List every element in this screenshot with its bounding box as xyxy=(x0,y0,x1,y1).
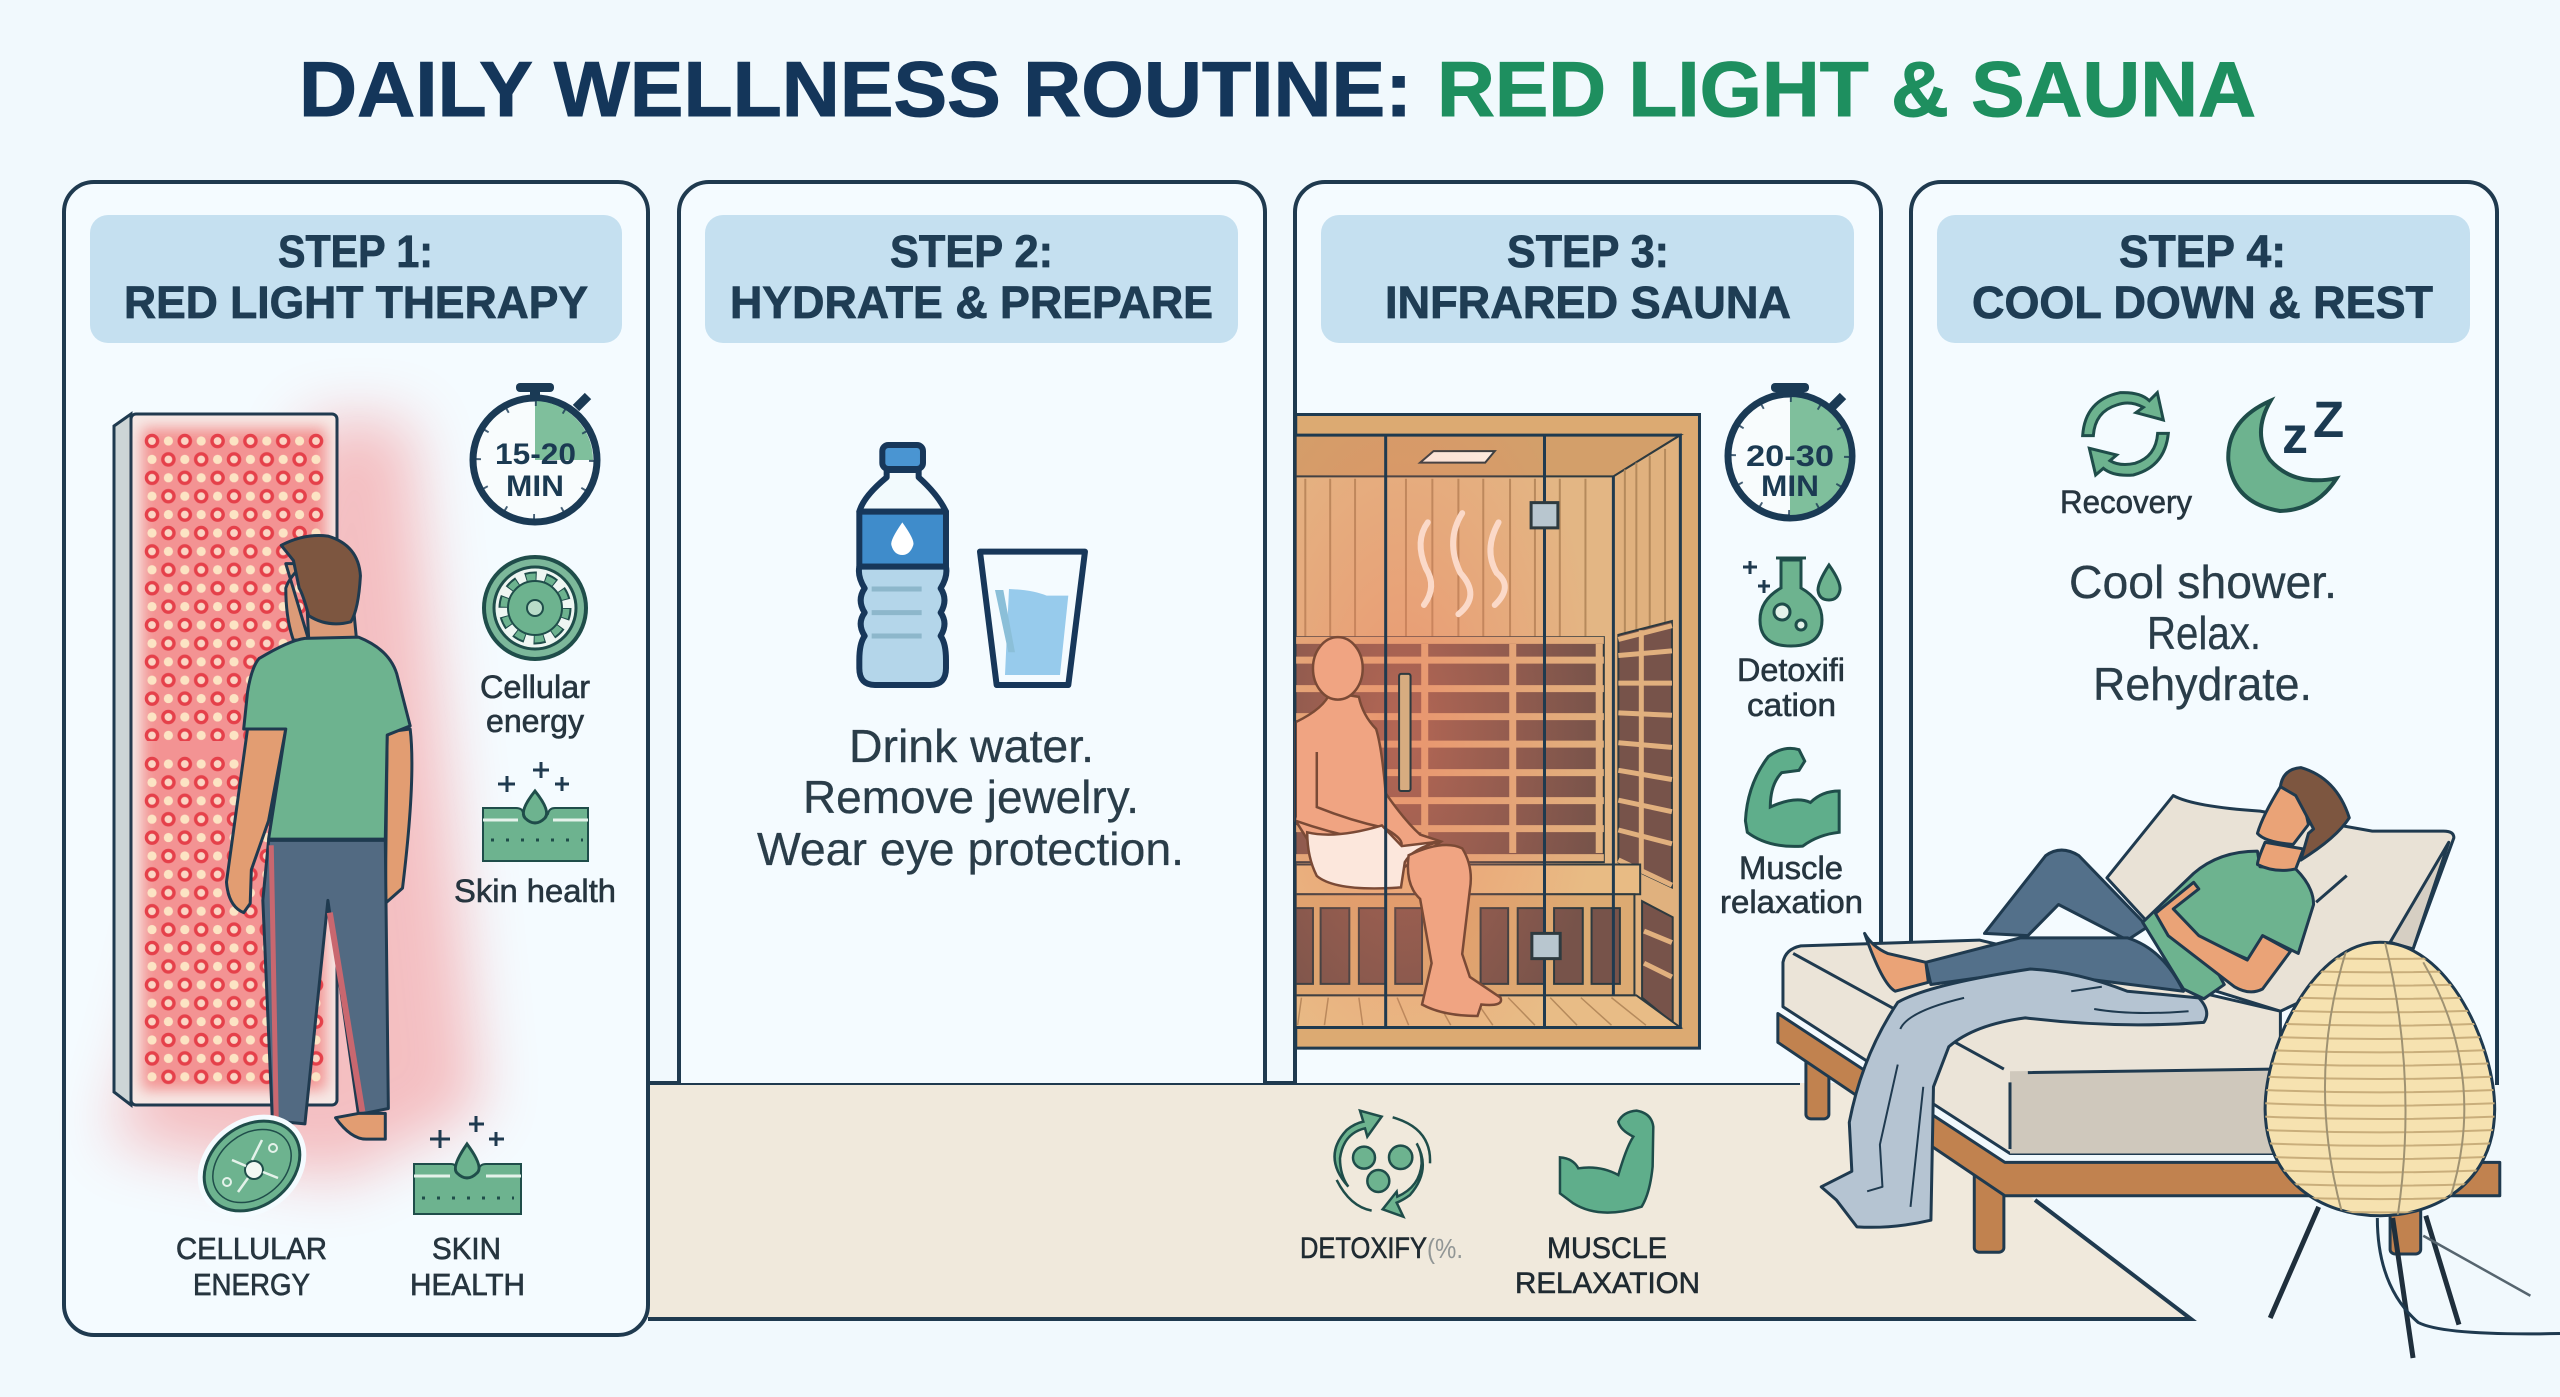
blanket xyxy=(1821,969,2207,1227)
label: detoxification xyxy=(1737,652,1845,723)
label: muscle relaxation: Muscle xyxy=(1739,850,1843,886)
icon: recovery arrows xyxy=(2083,393,2168,475)
step 3 header: STEP 3: xyxy=(1507,226,1669,277)
label: muscle relaxation caps: RELAXATION xyxy=(1515,1267,1700,1300)
icon: water glass xyxy=(980,552,1085,685)
label: recovery: Recovery xyxy=(2060,484,2192,520)
label: cellular energy caps xyxy=(176,1231,327,1302)
label: detoxification: Detoxifi xyxy=(1737,652,1845,688)
person standing from behind xyxy=(226,535,412,1139)
panel: step 3 infrared sauna xyxy=(1295,182,1881,1083)
heat waves xyxy=(1421,513,1505,614)
step 4 header: COOL DOWN & REST xyxy=(1972,277,2433,328)
timer 15-20 min: MIN xyxy=(506,470,564,503)
instructions step 4: Cool shower. xyxy=(2069,556,2337,608)
red light glow xyxy=(110,420,480,1180)
instructions step 4: Relax. xyxy=(2147,607,2261,659)
step 3 header xyxy=(1321,215,1854,343)
floor lamp xyxy=(2245,942,2560,1358)
panel: step 4 cool down and rest xyxy=(1911,182,2497,1085)
label: skin health caps: SKIN xyxy=(432,1231,501,1266)
icon: skin health xyxy=(483,762,588,861)
title: DAILY WELLNESS ROUTINE: xyxy=(299,45,1412,133)
bed legs xyxy=(1806,1056,2421,1254)
heat glow xyxy=(1296,435,1602,1027)
step 4 header xyxy=(1937,215,2470,343)
label: cellular energy xyxy=(480,669,590,739)
label: muscle relaxation caps: MUSCLE xyxy=(1547,1232,1667,1265)
timer 15-20 min xyxy=(473,383,597,522)
mattress xyxy=(1783,940,2280,1153)
timer 20-30 min xyxy=(1728,383,1852,518)
label group: rug benefits xyxy=(1300,1111,1700,1300)
label: detoxification: cation xyxy=(1747,687,1836,723)
reclining man xyxy=(1865,768,2349,999)
label: cellular energy caps: CELLULAR xyxy=(176,1231,327,1266)
icon: cell xyxy=(184,1100,320,1232)
seated person xyxy=(1296,637,1501,1016)
label: detoxify: (%. xyxy=(1427,1233,1463,1264)
step 2 header: HYDRATE & PREPARE xyxy=(730,277,1213,328)
icon: detox cycle xyxy=(1335,1111,1430,1217)
label: muscle relaxation xyxy=(1720,850,1863,920)
step 1 header xyxy=(90,215,622,343)
step 1 header: STEP 1: xyxy=(278,226,433,277)
step 1 header: RED LIGHT THERAPY xyxy=(124,277,588,328)
label: muscle relaxation: relaxation xyxy=(1720,884,1863,920)
icon: flexed arm xyxy=(1745,748,1839,846)
instructions step 2 xyxy=(757,720,1184,875)
rug xyxy=(648,1083,2191,1319)
icon: cellular energy gear xyxy=(484,557,586,659)
title: RED LIGHT & SAUNA xyxy=(1437,45,2256,133)
step 2 header: STEP 2: xyxy=(890,226,1053,277)
panel: step 2 hydrate and prepare xyxy=(679,182,1265,1083)
timer 15-20 min: 15-20 xyxy=(495,438,576,471)
icon: muscle arm xyxy=(1560,1111,1653,1213)
icon: moon and sleep xyxy=(2228,391,2344,511)
red light panel device xyxy=(114,414,337,1105)
sauna backrest xyxy=(1296,637,1604,862)
label: cellular energy: Cellular xyxy=(480,669,590,705)
label: muscle relaxation caps xyxy=(1515,1232,1700,1300)
instructions step 2: Wear eye protection. xyxy=(757,823,1184,875)
instructions step 4 xyxy=(2069,556,2337,710)
label: skin health caps xyxy=(410,1231,525,1302)
icon: moon and sleep: z xyxy=(2282,407,2308,465)
title xyxy=(299,45,2256,133)
sauna floor xyxy=(1296,995,1680,1027)
instructions step 2: Remove jewelry. xyxy=(803,771,1139,823)
step 3 header: INFRARED SAUNA xyxy=(1385,277,1791,328)
sauna bench xyxy=(1296,864,1640,894)
label: skin health caps: HEALTH xyxy=(410,1267,525,1302)
sauna illustration xyxy=(1295,380,1699,1053)
label: cellular energy: energy xyxy=(486,703,584,739)
icon: water bottle xyxy=(859,445,946,685)
glass door xyxy=(1296,435,1680,1027)
icon: detox flask xyxy=(1743,558,1840,646)
bed frame xyxy=(1778,1013,2500,1196)
step 2 header xyxy=(705,215,1238,343)
timer 20-30 min: MIN xyxy=(1761,470,1819,503)
backrest cushion xyxy=(2107,796,2454,1011)
icon: skin health lower xyxy=(414,1116,521,1214)
instructions step 4: Rehydrate. xyxy=(2093,658,2312,710)
label: cellular energy caps: ENERGY xyxy=(193,1267,310,1302)
daybed with reclining person xyxy=(1778,768,2560,1358)
instructions step 2: Drink water. xyxy=(849,720,1094,772)
sauna side panel xyxy=(1618,621,1672,887)
timer 20-30 min: 20-30 xyxy=(1746,440,1834,473)
icon: moon and sleep: Z xyxy=(2313,391,2344,448)
label: skin health: Skin health xyxy=(454,873,616,909)
label: detoxify: DETOXIFY xyxy=(1300,1232,1427,1265)
step 4 header: STEP 4: xyxy=(2119,226,2286,277)
panel: step 1 red light therapy xyxy=(64,182,648,1335)
